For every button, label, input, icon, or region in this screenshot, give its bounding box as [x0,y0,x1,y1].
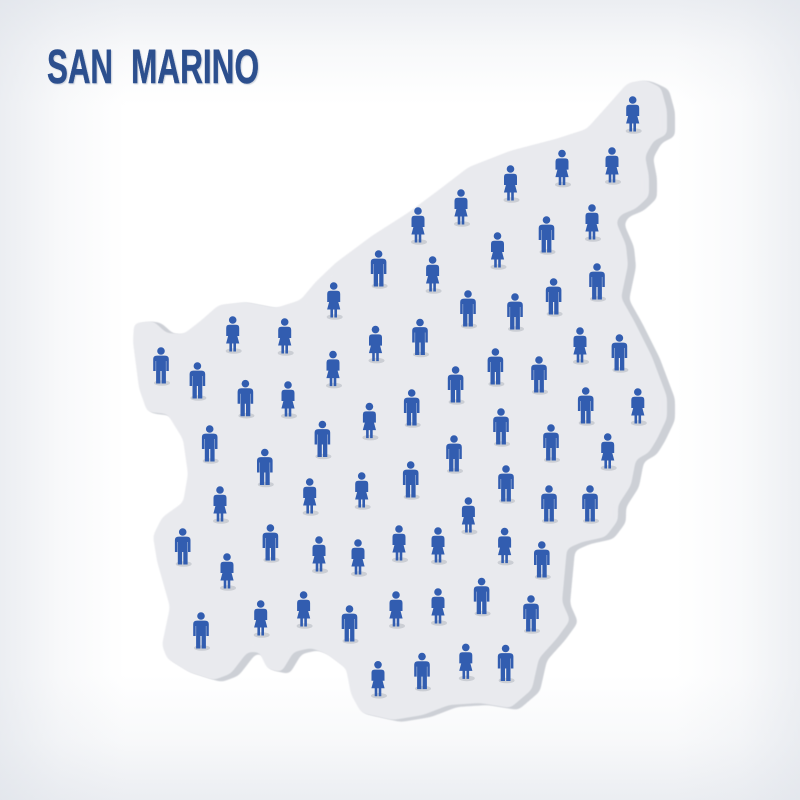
man [612,334,628,373]
woman [631,388,647,426]
man [498,465,515,504]
woman [213,486,229,524]
woman [355,472,371,510]
man [202,425,219,464]
man [534,541,551,580]
man [193,612,210,651]
man [582,485,599,524]
woman [585,204,601,242]
woman [426,256,442,294]
man [493,408,510,447]
woman [490,232,506,270]
man [448,366,465,405]
man [446,435,463,474]
man [238,380,254,418]
people figures [153,96,647,699]
man [474,578,491,616]
man [498,645,515,683]
man [175,528,192,567]
woman [454,189,470,227]
woman [431,588,447,626]
man [371,250,388,289]
man [546,278,563,317]
man [531,356,548,395]
woman [605,147,621,185]
title: MARINO [131,41,259,94]
woman [555,150,571,187]
man [190,362,206,401]
man [263,524,279,563]
woman [389,591,405,629]
woman [459,644,475,681]
woman [601,433,617,471]
woman [312,536,328,574]
woman [326,351,342,388]
woman [411,207,427,245]
man [460,290,477,329]
man [539,216,556,255]
man [578,387,595,426]
woman [461,497,477,535]
man [257,449,274,487]
title: SAN [47,41,113,94]
map top surface [134,81,666,719]
man [414,653,431,691]
title [47,41,259,94]
man [403,461,420,500]
man [342,605,358,644]
man [412,319,429,357]
woman [303,478,319,516]
woman [327,282,343,320]
woman [371,661,387,699]
man [543,424,560,463]
woman [254,600,270,638]
woman [504,165,520,203]
man [589,263,606,302]
woman [498,528,514,565]
map side extrusion [136,82,674,721]
woman [220,553,236,591]
woman [368,326,384,363]
woman [626,96,642,134]
woman [297,591,313,629]
man [523,595,540,634]
woman [392,525,408,563]
woman [278,318,294,356]
woman [431,527,447,565]
woman [226,316,242,354]
woman [351,539,367,577]
man [153,347,170,386]
woman [281,381,297,419]
man [541,485,558,524]
man [404,389,421,428]
woman [573,327,589,365]
map of San Marino [134,81,674,721]
woman [362,403,378,440]
man [315,421,331,459]
man [488,348,504,387]
man [507,293,524,332]
